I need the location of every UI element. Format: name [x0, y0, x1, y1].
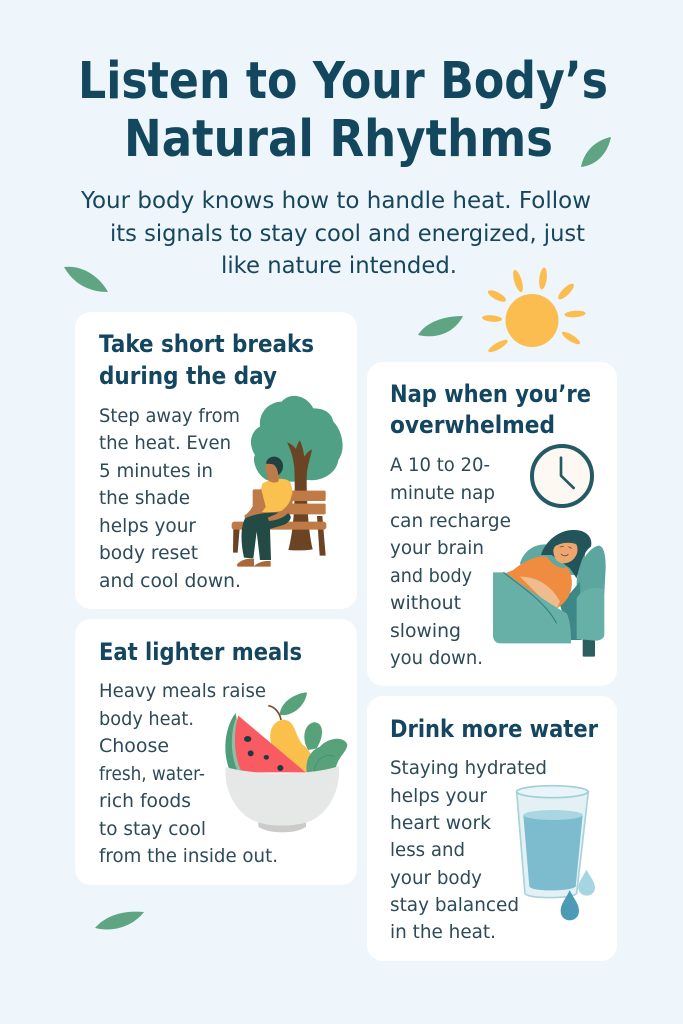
panel: drink more water [367, 696, 617, 961]
icon: leaf left [64, 267, 108, 292]
text: eat lighter meals body: to stay cool [99, 818, 206, 840]
icon: fruit bowl [225, 692, 347, 832]
icon: clock [532, 446, 592, 506]
heading: eat lighter meals: Eat lighter meals [99, 638, 302, 666]
text: drink more water body: in the heat. [390, 921, 496, 943]
heading: take short breaks: during the day [99, 362, 277, 390]
text: eat lighter meals body: from the inside out. [99, 845, 278, 867]
heading: nap when overwhelmed [390, 380, 591, 439]
text: eat lighter meals body: Choose [99, 735, 169, 757]
text: nap body: A 10 to 20- [390, 454, 490, 476]
subtitle: Your body knows how to handle heat. Follow [80, 188, 591, 214]
text: nap body: your brain [390, 537, 484, 559]
heading: take short breaks [99, 330, 314, 390]
heading: nap when overwhelmed: Nap when you’re [390, 380, 591, 408]
subtitle: like nature intended. [221, 253, 457, 279]
icon: person napping in armchair [493, 530, 606, 657]
title: Listen to Your Body’s [78, 52, 608, 111]
text: nap body [390, 454, 511, 669]
text: nap body: slowing [390, 620, 461, 642]
subtitle: its signals to stay cool and energized, just [110, 221, 585, 247]
text: take short breaks body: 5 minutes in [99, 460, 213, 482]
text: take short breaks body: the shade [99, 487, 190, 509]
icon: person on bench under tree [232, 396, 343, 567]
text: drink more water body: less and [390, 839, 465, 861]
text: nap body: without [390, 592, 461, 614]
subtitle [80, 188, 591, 279]
icon: glass of water with drops [517, 786, 595, 920]
text: drink more water body: heart work [390, 812, 491, 834]
text: drink more water body: helps your [390, 785, 487, 807]
text: take short breaks body: and cool down. [99, 570, 241, 592]
text: drink more water body: your body [390, 867, 482, 889]
icon: sun [482, 267, 586, 354]
text: nap body: and body [390, 565, 472, 587]
text: eat lighter meals body [99, 680, 278, 867]
text: drink more water body [390, 757, 547, 943]
panel: take short breaks [75, 312, 357, 609]
text: nap body: you down. [390, 647, 483, 669]
text: drink more water body: stay balanced [390, 894, 519, 916]
text: nap body: can recharge [390, 510, 511, 532]
text: nap body: minute nap [390, 482, 495, 504]
heading: nap when overwhelmed: overwhelmed [390, 411, 555, 439]
text: eat lighter meals body: fresh, water- [99, 763, 205, 785]
text: drink more water body: Staying hydrated [390, 757, 547, 779]
text: eat lighter meals body: Heavy meals raise [99, 680, 266, 702]
text: eat lighter meals body: body heat. [99, 708, 194, 730]
icon: leaf top right [581, 137, 611, 167]
text: take short breaks body: helps your [99, 515, 196, 537]
heading: drink more water: Drink more water [390, 715, 598, 743]
title [78, 52, 608, 169]
text: take short breaks body: the heat. Even [99, 432, 231, 454]
icon: leaf bottom [95, 912, 144, 930]
text: take short breaks body: Step away from [99, 405, 240, 427]
panel: eat lighter meals [75, 619, 357, 885]
text: eat lighter meals body: rich foods [99, 790, 191, 812]
icon: leaf middle [418, 316, 463, 336]
heading: take short breaks: Take short breaks [99, 330, 314, 358]
title: Natural Rhythms [124, 110, 553, 169]
panel: nap when overwhelmed [367, 362, 617, 686]
text: take short breaks body [99, 405, 241, 592]
text: take short breaks body: body reset [99, 542, 198, 564]
